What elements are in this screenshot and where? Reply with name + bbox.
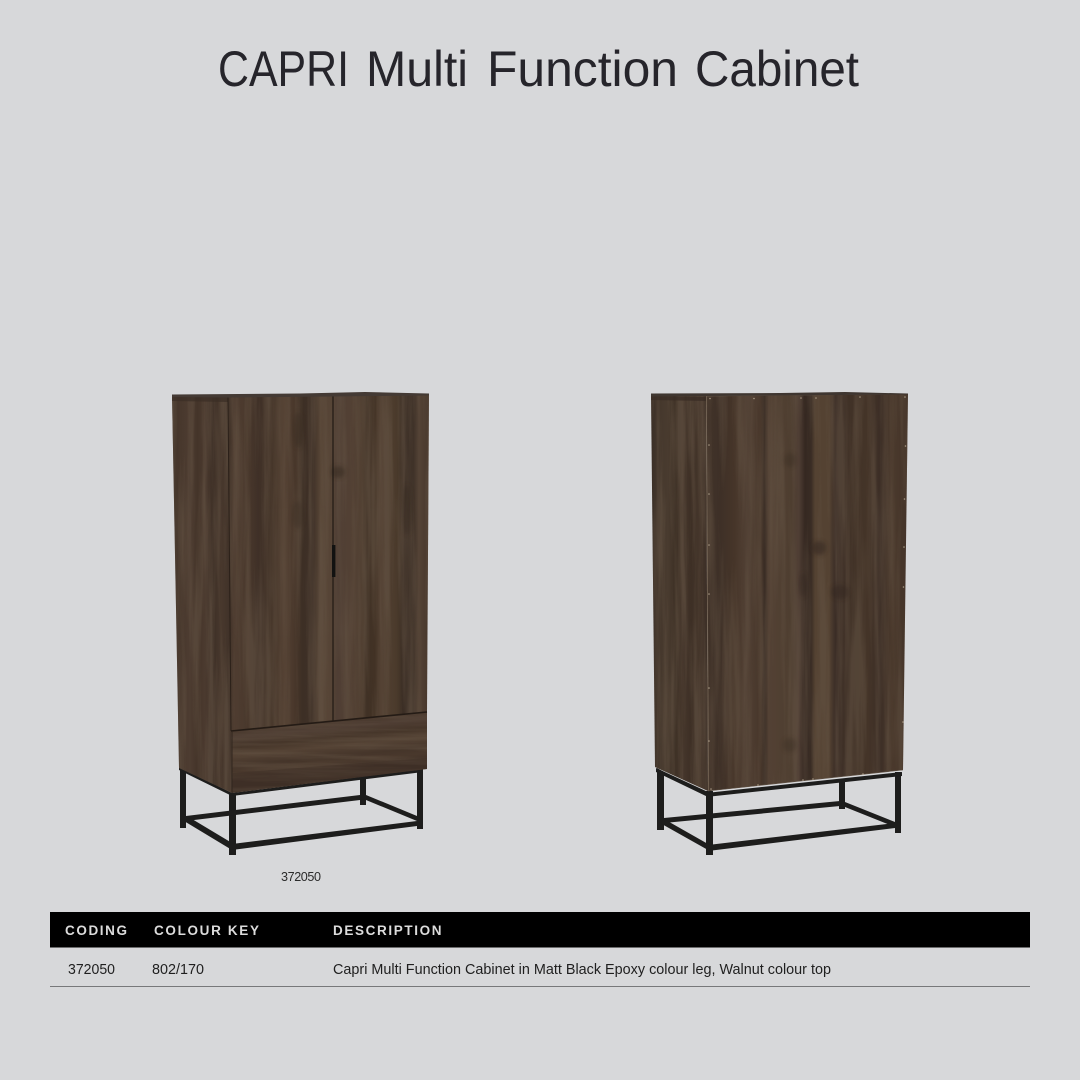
back panel nails: [708, 396, 906, 790]
metal leg frame, front view: [179, 767, 423, 855]
product: cabinet back view: [649, 392, 910, 855]
title: Cabinet: [695, 41, 859, 97]
table row: 372050: [68, 962, 115, 978]
back panel: [704, 392, 910, 794]
side panel, front view: [170, 392, 234, 796]
table header bar: COLOUR KEY: [154, 923, 259, 938]
table row: Capri Multi Function Cabinet in Matt Black Epoxy colour leg, Walnut colour top: [333, 962, 831, 978]
title: Function: [487, 41, 678, 97]
table header bar: [50, 912, 1030, 948]
table row: 802/170: [152, 962, 204, 978]
product: cabinet front view: [170, 392, 431, 855]
double doors: [226, 392, 431, 734]
side panel, back view: [649, 392, 711, 794]
title: CAPRI: [218, 41, 349, 97]
metal leg frame, back view: [656, 768, 902, 855]
title: [218, 41, 859, 97]
title: Multi: [366, 41, 468, 97]
table row: [68, 962, 831, 978]
table header bar: CODING: [65, 923, 127, 938]
product code caption: 372050: [281, 870, 321, 884]
drawer: [229, 710, 429, 795]
top board: [172, 392, 429, 398]
table header bar: DESCRIPTION: [333, 923, 442, 938]
top board: [651, 392, 908, 396]
door handle: [332, 545, 335, 577]
specification table: [50, 912, 1030, 987]
